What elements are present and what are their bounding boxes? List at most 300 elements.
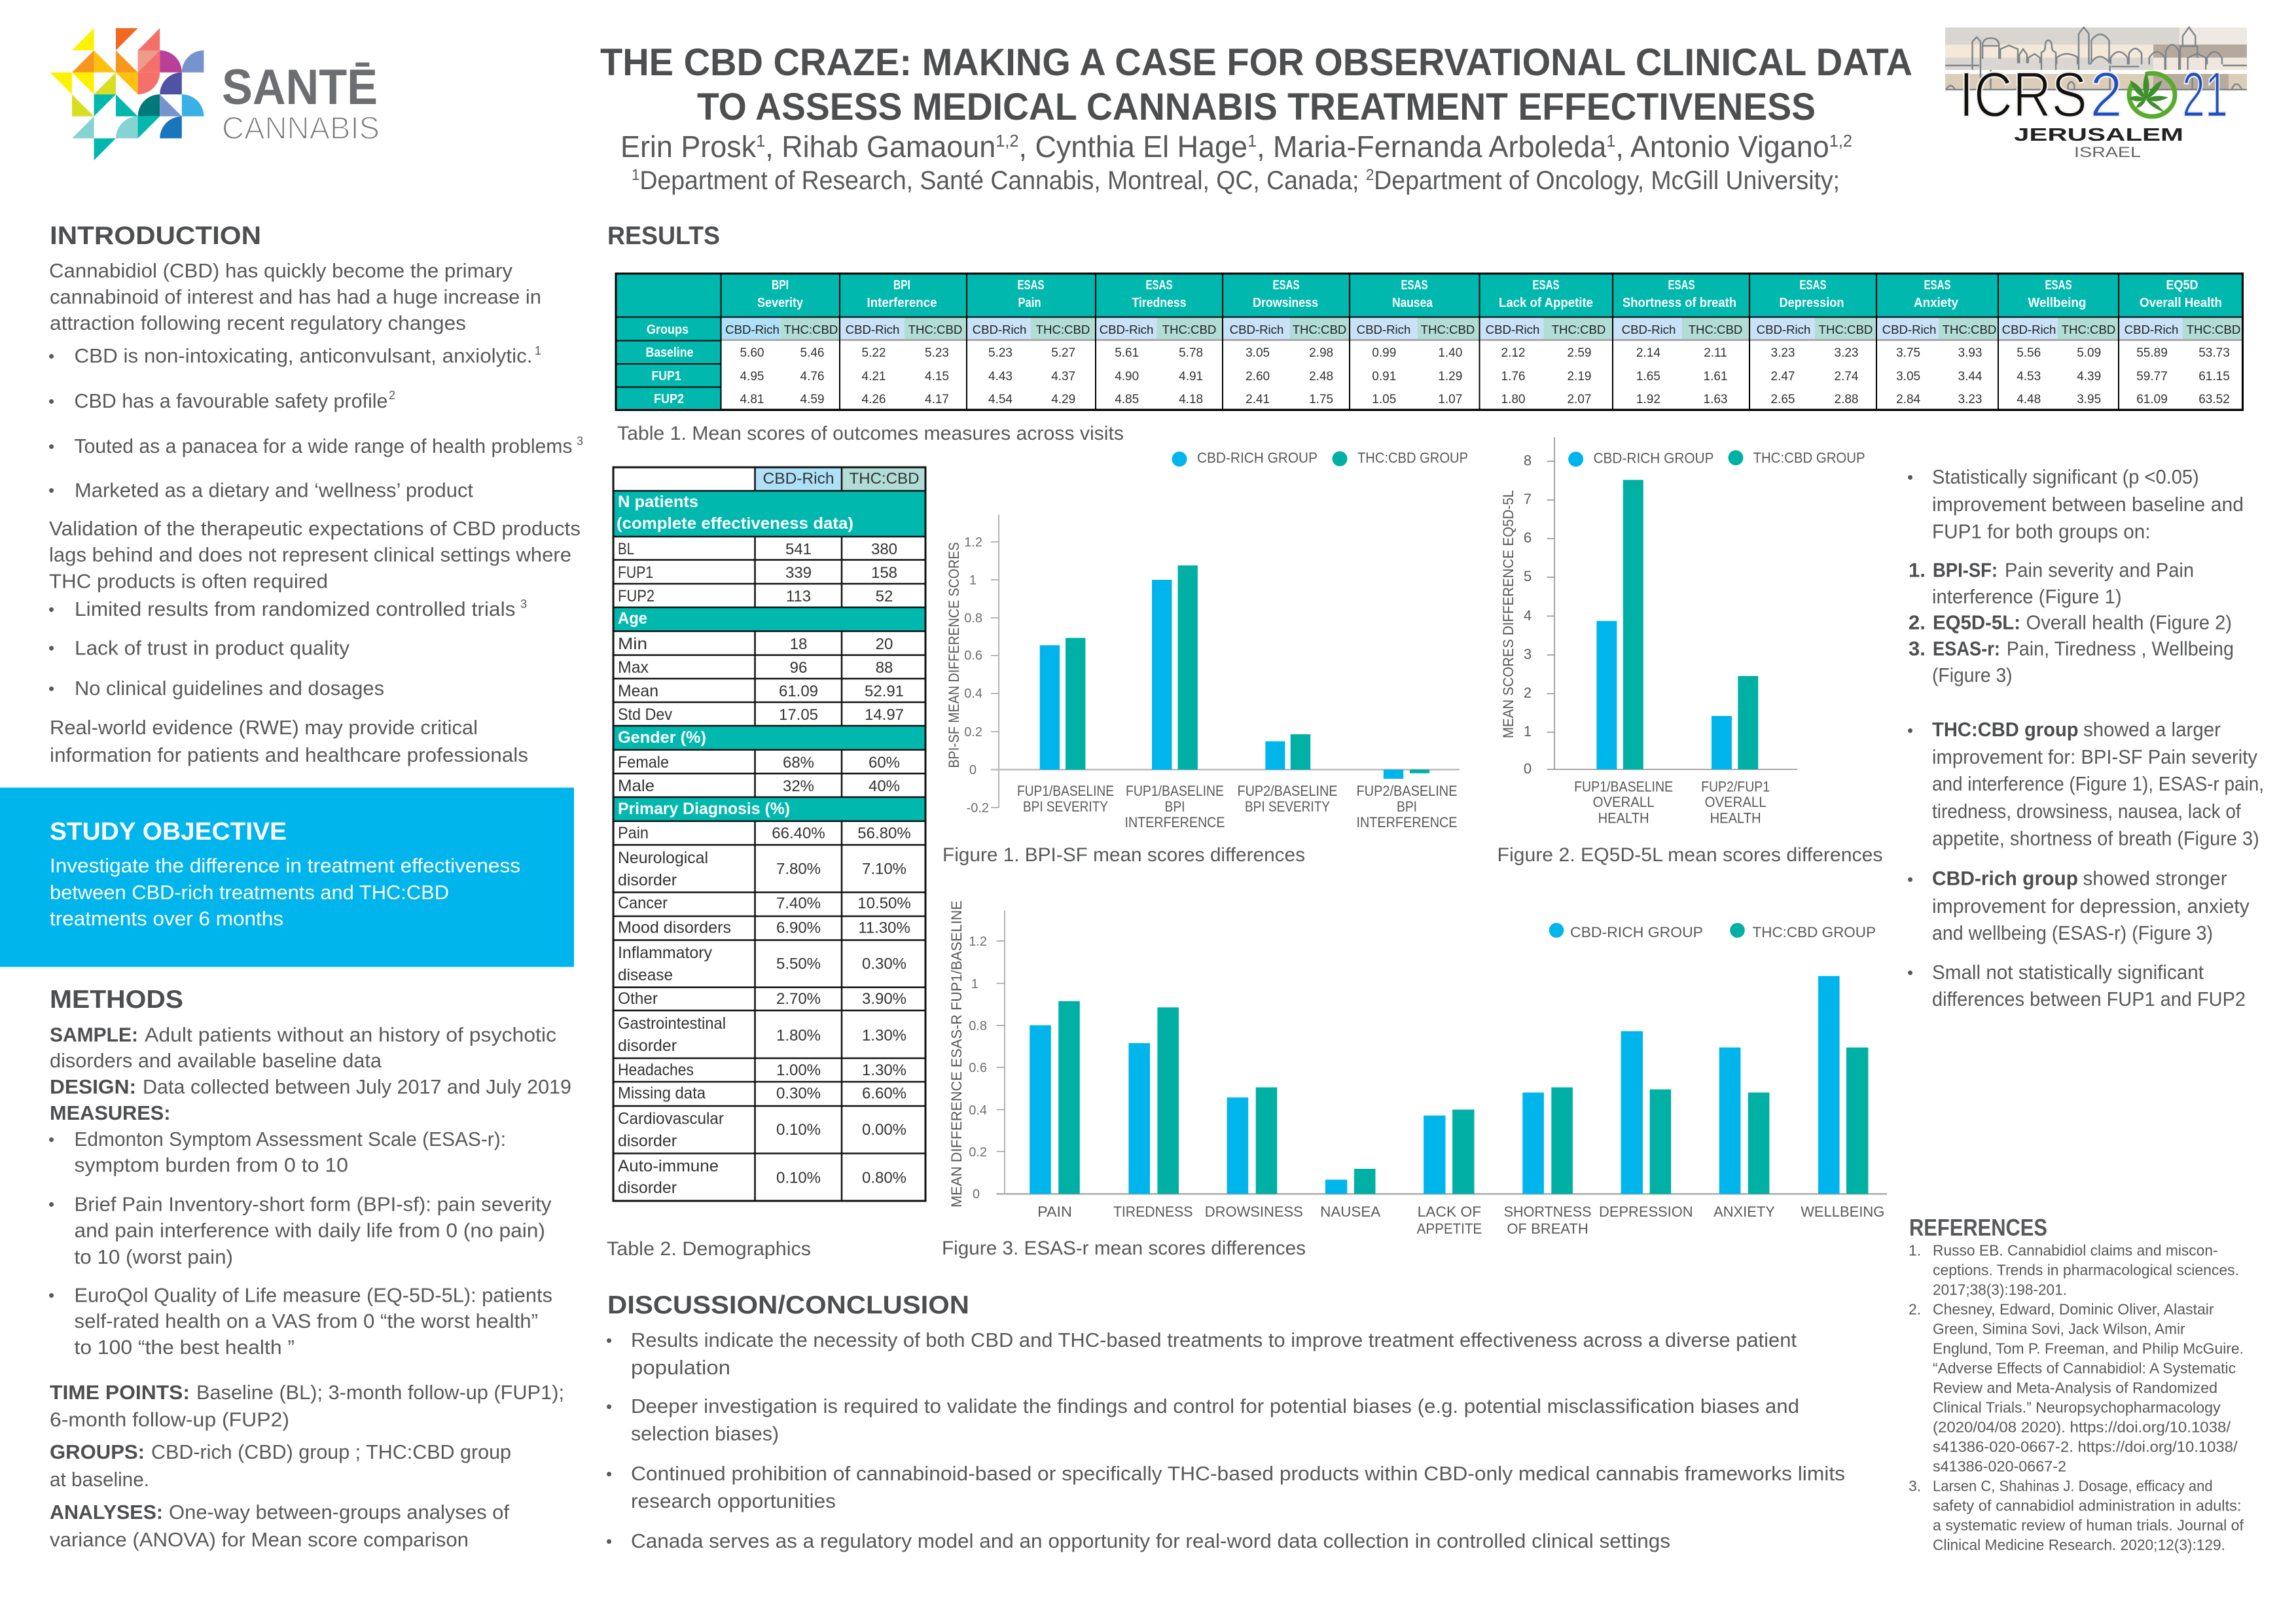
table 1 group labels: THC:CBD (784, 323, 838, 336)
intro bullets: CBD is non-intoxicating, anticonvulsant, anxiolytic. (75, 344, 533, 367)
table 2 section: primary diagnosis: 7.80% (776, 860, 821, 878)
measures list: to 100 “the best health ” (75, 1336, 295, 1359)
table 1 group labels (725, 323, 2240, 336)
table 1 column headings: ESAS (2045, 278, 2072, 293)
groups (50, 1440, 511, 1491)
reference 3: Clinical Medicine Research. 2020;12(3):129. (1933, 1537, 2225, 1554)
panel: methods (48, 986, 571, 1551)
table 2 section: primary diagnosis: 0.10% (776, 1121, 821, 1139)
table 2 section: primary diagnosis: Pain (618, 824, 649, 842)
table 2 section: primary diagnosis: Headaches (618, 1061, 694, 1079)
table 2 section: primary diagnosis: 0.30% (776, 1085, 821, 1102)
table 1 FUP1 values: 4.90 (1115, 370, 1139, 383)
figure 3 legend: CBD-RICH GROUP (1570, 924, 1703, 940)
reference 2: Green, Simina Sovi, Jack Wilson, Amir (1933, 1321, 2185, 1338)
table 1 column headings: ESAS (1401, 278, 1428, 293)
table 1 column headings: Wellbeing (2028, 296, 2087, 310)
discussion bullets: Results indicate the necessity of both CBD and THC-based treatments to improve treatment effectiveness across a diverse patient (631, 1329, 1797, 1351)
table 1 FUP1 values: 2.47 (1771, 370, 1795, 383)
table 1 FUP1 values: 2.48 (1309, 370, 1333, 383)
table 2 section: primary diagnosis: Inflammatory (618, 944, 712, 962)
table 1 row headings: Baseline (645, 346, 694, 360)
table 1 column headings: ESAS (1145, 278, 1173, 293)
finding: FUP1 vs FUP2: differences between FUP1 and FUP2 (1932, 988, 2246, 1010)
table 1 baseline values: 5.23 (925, 346, 949, 360)
figure 1 x-axis labels: INTERFERENCE (1124, 814, 1225, 830)
table 1 baseline values: 3.75 (1896, 346, 1920, 360)
figure 2 x-axis labels: FUP1/BASELINE (1574, 778, 1673, 794)
table 2 section: N patients: 52 (876, 588, 893, 605)
figure 1 y-axis labels: 0 (969, 763, 977, 777)
authors: 1 (1247, 131, 1257, 151)
table 2 column headings (763, 470, 919, 488)
table 1 row headings: Groups (647, 323, 689, 337)
figure 1 x-axis labels: INTERFERENCE (1356, 814, 1457, 830)
numbered measures (1909, 559, 2234, 687)
table 1 FUP2 values: 4.81 (740, 393, 764, 406)
table 2 grid (613, 467, 925, 1201)
figure 3 x-axis labels: WELLBEING (1801, 1204, 1884, 1220)
table 1 FUP2 values: 2.41 (1246, 393, 1270, 406)
figure 3 y-axis labels: 1.2 (969, 935, 987, 949)
figure 2 y-axis labels (1524, 452, 1532, 777)
figure 3 y-axis labels: 0.8 (969, 1019, 987, 1033)
finding: statistically significant improvement: Statistically significant (p <0.05) (1932, 465, 2199, 488)
analyses (50, 1501, 509, 1551)
table 2 section: primary diagnosis: 1.30% (862, 1061, 906, 1079)
figure 2 x-axis labels: HEALTH (1710, 810, 1761, 827)
panel: references (1909, 1214, 2244, 1554)
validation paragraph: Validation of the therapeutic expectations of CBD products (49, 517, 581, 540)
intro bullets: 2 (389, 389, 395, 402)
finding: FUP1 vs FUP2: Small not statistically significant (1932, 961, 2204, 984)
figure 3 x-axis labels: TIREDNESS (1113, 1204, 1193, 1220)
table 2 section: primary diagnosis: Missing data (618, 1084, 706, 1102)
figure 1 x-axis labels: BPI (1165, 798, 1185, 815)
time points: Baseline (BL); 3-month follow-up (FUP1); (196, 1381, 564, 1404)
caption: table 1: Table 1. Mean scores of outcomes measures across visits (617, 423, 1124, 444)
figure 1 x-axis labels (1017, 783, 1457, 830)
skyline outline (1945, 27, 2247, 90)
intro bullets: 1 (535, 344, 541, 357)
intro bullets: Marketed as a dietary and ‘wellness’ product (75, 479, 473, 501)
table 1 baseline values: 3.23 (1771, 346, 1795, 360)
table 1 baseline values: 1.40 (1438, 346, 1462, 360)
table 1 FUP2 values: 2.07 (1568, 393, 1591, 406)
finding: THC:CBD group: tiredness, drowsiness, nausea, lack of (1932, 800, 2241, 823)
table 1 FUP1 values: 2.60 (1246, 370, 1270, 383)
figure 3 x-axis labels: PAIN (1037, 1204, 1072, 1220)
logo wordmark: SANTĒ (222, 60, 378, 115)
table 1 group labels: THC:CBD (1689, 323, 1742, 336)
2021 lettering (2090, 59, 2228, 130)
table 1 baseline values: 2.11 (1704, 346, 1727, 360)
figure 3 y-axis labels: 0 (973, 1187, 980, 1202)
sample and design: disorders and available baseline data (50, 1049, 382, 1072)
finding: CBD-rich group: • (1907, 869, 1913, 889)
table 2 section: N patients: 339 (785, 564, 812, 582)
logo location text (2014, 124, 2183, 160)
table 1 baseline values: 5.23 (988, 346, 1013, 360)
table 1 column headings: EQ5D (2166, 278, 2198, 293)
table 1 baseline values: 5.61 (1115, 346, 1139, 360)
authors: , Maria-Fernanda Arboleda (1257, 130, 1607, 164)
figure 2 y-axis title: MEAN SCORES DIFFERENCE EQ5D-5L (1500, 490, 1516, 738)
logo: ICRS 2021 Jerusalem (1945, 27, 2247, 160)
reference 3: Larsen C, Shahinas J. Dosage, efficacy and (1933, 1478, 2213, 1495)
finding: THC:CBD group (1907, 718, 2264, 850)
table 1 FUP1 values: 2.74 (1835, 370, 1859, 383)
table 2: demographics (613, 467, 925, 1201)
table 1 column headings: Nausea (1392, 296, 1433, 310)
table 2 section: age: 18 (790, 635, 807, 653)
affiliations: Department of Research, Santé Cannabis, Montreal, QC, Canada; (639, 166, 1366, 195)
figure 3 x-axis labels: DROWSINESS (1205, 1204, 1303, 1220)
measures list: Brief Pain Inventory-short form (BPI-sf): pain severity (75, 1192, 552, 1216)
discussion bullets: Deeper investigation is required to validate the findings and control for potential biases (e.g. potential misclassification biases and (631, 1395, 1799, 1418)
finding: statistically significant improvement: FUP1 for both groups on: (1932, 520, 2151, 543)
discussion bullets: • (606, 1531, 612, 1551)
table 1 FUP2 values: 1.05 (1372, 393, 1396, 406)
table 1 column headings (757, 278, 2222, 310)
table 2 section: gender (618, 728, 900, 795)
figure 2 y-axis labels: 0 (1524, 760, 1532, 777)
figure 3 y-axis title: MEAN DIFFERENCE ESAS-R FUP1/BASELINE (948, 901, 965, 1207)
limitation bullets (48, 597, 527, 700)
table 1 group labels: CBD-Rich (725, 323, 780, 336)
table 1 FUP1 values: 1.61 (1704, 370, 1727, 383)
table 1 FUP1 values: 4.43 (988, 370, 1013, 383)
reference 1: Russo EB. Cannabidiol claims and miscon- (1933, 1242, 2218, 1259)
table 1 FUP2 values: 1.92 (1636, 393, 1660, 406)
measures list: and pain interference with daily life from 0 (no pain) (75, 1219, 545, 1242)
reference 2: Review and Meta-Analysis of Randomized (1933, 1380, 2217, 1397)
table 1 group labels: CBD-Rich (1230, 323, 1283, 336)
sample and design: DESIGN: (50, 1075, 136, 1098)
discussion bullets: • (606, 1397, 612, 1416)
table 1 FUP1 values: 1.76 (1501, 370, 1525, 383)
figure 1 bars (1040, 565, 1429, 779)
table 1 column headings: Shortness of breath (1623, 296, 1736, 310)
numbered measures: EQ5D-5L: (1933, 611, 2020, 633)
measures list: • (48, 1130, 54, 1149)
limitation bullets: • (48, 599, 54, 619)
real-world evidence paragraph: information for patients and healthcare professionals (50, 743, 528, 766)
limitation bullets: Lack of trust in product quality (75, 636, 350, 660)
figure 3 x-axis labels: SHORTNESS (1504, 1204, 1592, 1220)
heading: results: RESULTS (607, 222, 720, 250)
logo location text: ISRAEL (2074, 144, 2141, 160)
table 1 group labels: THC:CBD (2062, 323, 2115, 336)
finding: THC:CBD group: • (1907, 721, 1913, 740)
figure 2 legend: CBD-RICH GROUP (1593, 450, 1713, 467)
table 1 group labels: THC:CBD (1552, 323, 1605, 336)
figure 3 y-axis labels: 0.6 (969, 1061, 987, 1075)
table 1 FUP1 values: 3.44 (1958, 370, 1982, 383)
sample and design: MEASURES: (50, 1101, 170, 1124)
figure 3 legend: THC:CBD GROUP (1753, 924, 1876, 940)
finding: CBD-rich group: and wellbeing (ESAS-r) (Figure 3) (1932, 921, 2213, 944)
affiliations: Department of Oncology, McGill University; (1374, 166, 1840, 195)
figure 2 y-axis labels: 5 (1524, 568, 1532, 584)
reference 1: 1. (1909, 1242, 1921, 1259)
authors: 1,2 (1829, 131, 1852, 151)
discussion bullets (606, 1329, 1845, 1552)
table 1 group labels: THC:CBD (1293, 323, 1346, 336)
table 2 section: age (618, 609, 904, 724)
2021 lettering: 2 (2090, 59, 2123, 130)
table 1 FUP1 values: 61.15 (2198, 370, 2230, 383)
table 2 section: age: 20 (876, 635, 893, 653)
finding: CBD-rich group (1907, 866, 2250, 944)
table 1 FUP2 values: 1.75 (1309, 393, 1333, 406)
logo wordmark (222, 60, 380, 146)
reference 2: “Adverse Effects of Cannabidiol: A Systematic (1933, 1360, 2236, 1377)
reference 2: (2020/04/08 2020). https://doi.org/10.1038/ (1933, 1419, 2231, 1436)
table 1 FUP2 values: 3.95 (2077, 393, 2101, 406)
intro bullets: Touted as a panacea for a wide range of health problems (75, 435, 572, 457)
finding: CBD-rich group: CBD-rich group (1932, 866, 2078, 890)
table 1 baseline values: 3.05 (1246, 346, 1270, 360)
table 1 FUP2 values: 4.54 (988, 393, 1013, 406)
limitation bullets: Limited results from randomized controlled trials (75, 597, 516, 620)
heading: introduction: INTRODUCTION (50, 222, 261, 250)
table 2 section: N patients: BL (618, 540, 634, 558)
finding: statistically significant improvement (1907, 465, 2244, 543)
table 1 group labels: THC:CBD (1819, 323, 1873, 336)
title (600, 41, 1912, 128)
figure 1 y-axis labels: 0.4 (964, 687, 982, 701)
validation paragraph: THC products is often required (49, 569, 328, 593)
figure 3 y-axis labels: 0.2 (969, 1145, 987, 1160)
table 1 group labels: CBD-Rich (1100, 323, 1153, 336)
table 1 baseline values: 3.23 (1835, 346, 1858, 360)
limitation bullets: No clinical guidelines and dosages (75, 677, 384, 700)
table 2 section: N patients: FUP2 (618, 587, 655, 605)
table 1 FUP2 values: 63.52 (2198, 393, 2230, 406)
table 1 baseline values: 5.78 (1179, 346, 1203, 360)
table 1 group labels: CBD-Rich (973, 323, 1026, 336)
table 1 column headings: BPI (772, 278, 789, 293)
finding: THC:CBD group: and interference (Figure 1), ESAS-r pain, (1932, 772, 2264, 795)
measures list: EuroQol Quality of Life measure (EQ-5D-5L): patients (75, 1284, 552, 1306)
intro bullets (48, 344, 583, 501)
finding: THC:CBD group: appetite, shortness of breath (Figure 3) (1932, 827, 2259, 850)
analyses: variance (ANOVA) for Mean score comparison (50, 1528, 469, 1551)
authors: , Antonio Vigano (1615, 130, 1829, 164)
table 1 row headings (645, 323, 694, 406)
table 2 section: primary diagnosis: 5.50% (776, 955, 821, 972)
table 2 section: primary diagnosis: 1.80% (776, 1027, 821, 1044)
table 2 section: N patients (617, 493, 897, 605)
caption: figure 1: Figure 1. BPI-SF mean scores differences (942, 844, 1305, 866)
table 2 section: age: Std Dev (618, 705, 672, 724)
table 2 section: primary diagnosis: 7.40% (776, 895, 821, 912)
reference 3: 3. (1909, 1478, 1921, 1495)
validation paragraph (49, 517, 581, 593)
intro paragraph: cannabinoid of interest and has had a huge increase in (50, 285, 541, 308)
table 1 group labels: THC:CBD (2187, 323, 2240, 336)
figure 1 y-axis labels: 1 (969, 573, 977, 588)
figure 3 x-axis labels: APPETITE (1417, 1221, 1482, 1237)
reference 3 (1909, 1478, 2244, 1554)
table 2 section: gender: 68% (783, 754, 814, 772)
table 1 group labels: CBD-Rich (1757, 323, 1810, 336)
logo wordmark: CANNABIS (222, 111, 380, 146)
finding: THC:CBD group: THC:CBD group (1932, 718, 2079, 741)
table 1 group labels: THC:CBD (1943, 323, 1996, 336)
figure 2 bars (1596, 480, 1758, 770)
figure 3 x-axis labels: DEPRESSION (1599, 1204, 1693, 1220)
panel: introduction (48, 222, 583, 766)
table 2 section: primary diagnosis (618, 800, 911, 1197)
table 1 FUP1 values: 4.39 (2077, 370, 2101, 383)
finding: CBD-rich group: showed stronger (2083, 866, 2227, 890)
caption: figure 2: Figure 2. EQ5D-5L mean scores differences (1498, 844, 1882, 866)
table 1 group labels: CBD-Rich (1882, 323, 1936, 336)
intro bullets: CBD has a favourable safety profile (75, 389, 387, 412)
table 2 section: primary diagnosis: 3.90% (862, 990, 906, 1008)
table 1 FUP2 values: 4.85 (1115, 393, 1139, 406)
table 1 FUP1 values: 4.15 (925, 370, 949, 383)
table 2 section: age: 96 (790, 659, 807, 677)
table 2 section: N patients: 113 (786, 588, 811, 605)
table 2 section: primary diagnosis: Gastrointestinal (618, 1014, 726, 1033)
table 2 fills (613, 467, 925, 821)
figure 3 y-axis labels: 0.4 (969, 1103, 987, 1118)
table 1 FUP1 values: 3.05 (1896, 370, 1920, 383)
reference 2: s41386-020-0667-2. https://doi.org/10.1038/ (1933, 1438, 2238, 1455)
real-world evidence paragraph (50, 716, 528, 766)
table 2 column headings: THC:CBD (850, 470, 919, 488)
table 1 baseline values: 53.73 (2198, 346, 2230, 360)
table 1 FUP1 values: 4.91 (1179, 370, 1203, 383)
table 1 group labels: CBD-Rich (1486, 323, 1539, 336)
table 2 section: age: 88 (876, 659, 893, 677)
discussion bullets: research opportunities (631, 1489, 836, 1512)
table 2 section: primary diagnosis: Primary Diagnosis (%) (618, 800, 790, 818)
figure 1 x-axis labels: FUP2/BASELINE (1237, 783, 1338, 799)
figure 2 y-axis labels: 1 (1524, 723, 1532, 740)
figure 1 x-axis labels: FUP1/BASELINE (1126, 783, 1224, 799)
panel: key findings (1907, 465, 2264, 1010)
discussion bullets: Canada serves as a regulatory model and an opportunity for real-word data collection in controlled clinical settings (631, 1529, 1670, 1552)
sample and design: SAMPLE: (50, 1024, 138, 1046)
ICRS lettering: ICRS (1959, 59, 2087, 130)
authors: 1 (1606, 131, 1615, 151)
measures list: • (48, 1285, 54, 1305)
table 2 section: gender: 40% (869, 777, 900, 795)
discussion bullets: • (606, 1464, 612, 1484)
table 1 FUP2 values: 4.26 (862, 393, 886, 406)
table 2 section: age: 17.05 (779, 706, 818, 724)
table 1 column headings: ESAS (1800, 278, 1826, 293)
table 1 FUP2 values: 4.48 (2017, 393, 2041, 406)
intro bullets: • (48, 346, 54, 366)
table 1 FUP1 values: 4.53 (2017, 370, 2041, 383)
table 1 column headings: Pain (1018, 296, 1041, 310)
caption: table 2: Table 2. Demographics (607, 1238, 811, 1260)
figure 1 y-axis labels: 0.6 (964, 649, 982, 663)
table 1 baseline values: 2.12 (1501, 346, 1525, 360)
table 1 row headings: FUP1 (652, 369, 681, 383)
table 2 section: N patients: N patients (618, 493, 698, 511)
table 2 section: primary diagnosis: 10.50% (857, 895, 911, 912)
table 1 FUP2 values: 4.17 (925, 393, 949, 406)
figure 1 y-axis labels: 0.2 (964, 725, 982, 740)
table 2 section: primary diagnosis: 6.90% (776, 919, 821, 937)
table 1 column headings: Anxiety (1914, 296, 1959, 310)
table 2 section: primary diagnosis: disorder (618, 871, 677, 889)
table 1 baseline values: 5.22 (862, 346, 886, 360)
figure 2 y-axis labels: 3 (1524, 646, 1532, 662)
time points: 6-month follow-up (FUP2) (50, 1408, 289, 1431)
measures list: Edmonton Symptom Assessment Scale (ESAS-r): (75, 1128, 506, 1150)
finding: THC:CBD group: improvement for: BPI-SF Pain severity (1932, 745, 2257, 768)
table 2 section: age: 14.97 (865, 706, 904, 724)
figure 1 y-axis labels: 0.8 (964, 611, 982, 626)
table 1 FUP2 values: 2.88 (1835, 393, 1858, 406)
numbered measures: 3. (1909, 637, 1926, 660)
reference 2: Clinical Trials.” Neuropsychopharmacology (1933, 1399, 2221, 1416)
table 1 FUP1 values: 0.91 (1372, 370, 1396, 383)
table 2 section: primary diagnosis: disease (618, 966, 673, 984)
table 1 FUP2 values: 3.23 (1958, 393, 1982, 406)
figure 2 x-axis labels: OVERALL (1705, 794, 1767, 810)
reference 2: s41386-020-0667-2 (1933, 1458, 2066, 1475)
numbered measures: Pain severity and Pain (2005, 559, 2194, 582)
sample and design (50, 1024, 571, 1124)
table 1 FUP1 values: 4.37 (1051, 370, 1075, 383)
table 2 section: primary diagnosis: Mood disorders (618, 919, 731, 937)
heading: study objective: STUDY OBJECTIVE (50, 818, 287, 846)
table 2 section: primary diagnosis: 0.10% (776, 1169, 821, 1187)
analyses: ANALYSES: (50, 1501, 163, 1524)
figure 1 y-axis labels: -0.2 (967, 801, 989, 815)
authors: , Cynthia El Hage (1019, 130, 1247, 164)
authors: Erin Prosk (620, 130, 759, 164)
figure 1 axes (991, 514, 1460, 808)
figure 1 y-axis title: BPI-SF MEAN DIFFERENCE SCORES (946, 542, 962, 768)
chart: figure 2 EQ5D-5L (1500, 437, 1865, 827)
objective text: Investigate the difference in treatment effectiveness (50, 854, 520, 877)
figure 1 x-axis labels: BPI (1397, 798, 1417, 815)
table 2 section: gender: 60% (869, 754, 900, 772)
table 1 FUP2 values: 1.63 (1704, 393, 1727, 406)
figure 2 x-axis labels (1574, 778, 1770, 827)
table 1 FUP1 values: 4.76 (800, 370, 824, 383)
table 1 group labels: THC:CBD (1421, 323, 1475, 336)
numbered measures: 2. (1909, 611, 1926, 633)
table 2 section: N patients: 541 (785, 541, 812, 558)
table 2 section: N patients: (complete effectiveness data) (617, 514, 853, 533)
table 1 group labels: THC:CBD (1036, 323, 1090, 336)
analyses: One-way between-groups analyses of (169, 1501, 509, 1524)
finding: THC:CBD group: showed a larger (2083, 718, 2221, 741)
numbered measures: BPI-SF: (1933, 559, 1998, 582)
table 2 section: primary diagnosis: Cancer (618, 894, 668, 912)
time points (50, 1381, 564, 1431)
caption: figure 3: Figure 3. ESAS-r mean scores differences (942, 1238, 1306, 1259)
discussion bullets: population (631, 1356, 730, 1379)
table 1 FUP1 values: 1.29 (1438, 370, 1462, 383)
reference 3: safety of cannabidiol administration in adults: (1933, 1497, 2242, 1514)
discussion bullets: • (606, 1330, 612, 1350)
authors: 1 (756, 131, 765, 151)
numbered measures: interference (Figure 1) (1932, 585, 2122, 608)
reference 1: 2017;38(3):198-201. (1933, 1281, 2067, 1298)
table 1 column headings: Tiredness (1132, 296, 1186, 310)
